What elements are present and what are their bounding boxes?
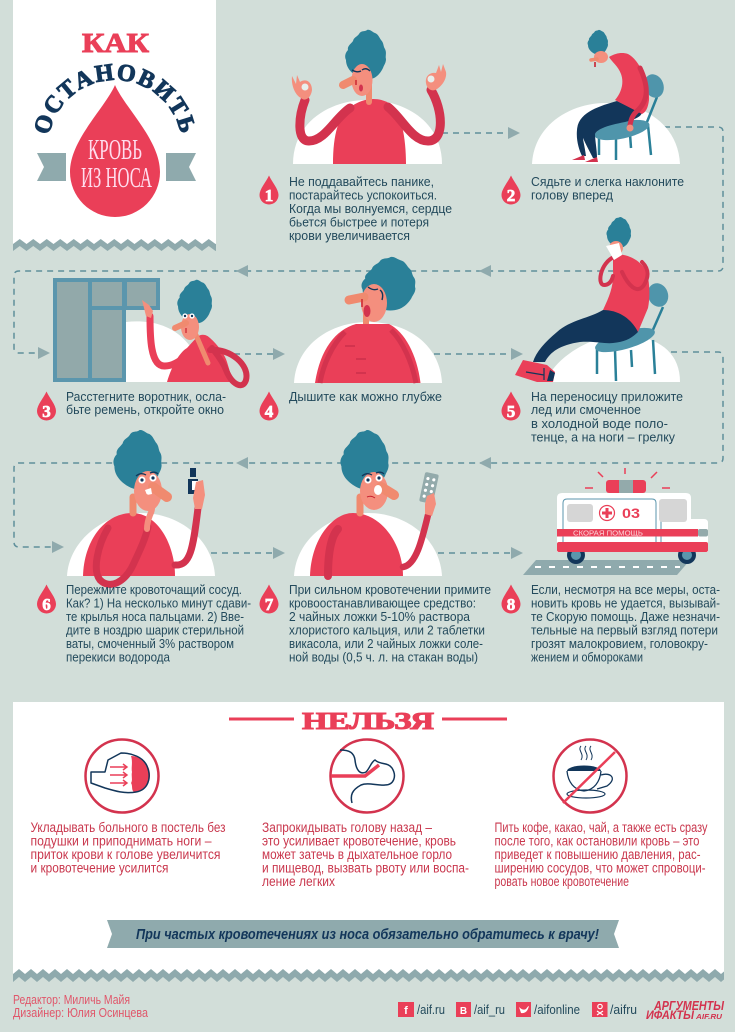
text: step 5: На переносицу приложите	[531, 389, 683, 404]
text: step 8: тельные на первый взгляд потери	[531, 622, 718, 638]
figure 7: holding pills	[294, 430, 442, 576]
text: step 2	[531, 174, 684, 202]
badge 7: 7	[265, 595, 274, 614]
text: step 6	[66, 582, 251, 664]
social links: f	[404, 1005, 408, 1017]
text: step 4: Дышите как можно глубже	[289, 389, 442, 404]
text: no hot drinks: ровать новое кровотечение	[494, 874, 629, 889]
text: step 6: дите в ноздрю шарик стерильной	[66, 622, 244, 638]
badge 4: 4	[265, 402, 274, 421]
panel: prohibitions	[13, 702, 724, 982]
text: step 1: крови увеличивается	[289, 228, 410, 243]
heading: НЕЛЬЗЯ: НЕЛЬЗЯ	[302, 709, 434, 735]
logo: aif: ИФАКТЫ	[646, 1010, 694, 1022]
text: no tilting head	[262, 820, 469, 889]
social links: /aifonline	[534, 1002, 580, 1017]
badge 7	[260, 584, 278, 614]
text: step 8: те Скорую помощь. Даже незначи-	[531, 609, 720, 624]
text: no lying down: Укладывать больного в постель без	[30, 820, 226, 835]
red cross	[600, 506, 614, 520]
text: step 5: тенце, а на ноги – грелку	[531, 430, 675, 444]
text: step 1: постарайтесь успокоиться.	[289, 188, 437, 202]
text: step 1: бьется быстрее и потеря	[289, 214, 429, 230]
text: no hot drinks	[494, 820, 708, 889]
icon: crossed coffee cup	[554, 740, 626, 812]
figure 4: breathing deeply	[294, 257, 442, 383]
text: step 6: Пережмите кровоточащий сосуд.	[66, 582, 242, 597]
text: no tilting head: это усиливает кровотечение, кровь	[262, 834, 456, 848]
figure 6: pinching nose	[67, 430, 215, 584]
badge 2: 2	[507, 186, 515, 205]
figure 1: calm person	[292, 30, 446, 164]
figure 2: seated leaning forward	[532, 30, 680, 164]
badge 5	[502, 392, 520, 421]
badge 3: 3	[42, 402, 51, 421]
badge 6	[37, 584, 56, 614]
footer credits: Редактор: Миличь Майя	[13, 992, 130, 1007]
callout ribbon	[107, 920, 619, 948]
badge 8: 8	[507, 595, 515, 614]
figure 3: opening window	[53, 278, 247, 385]
text: step 5: в холодной воде поло-	[531, 416, 668, 431]
badge 4	[260, 392, 278, 421]
window	[53, 278, 160, 382]
panel: title header	[13, 0, 216, 251]
heading: ОСТАНОВИТЬ: ОСТАНОВИТЬ	[35, 63, 195, 133]
figure 8: ambulance	[523, 468, 708, 575]
text: step 6: те крылья носа пальцами. 2) Вве-	[66, 609, 244, 624]
text: no lying down: приток крови к голове увеличится	[30, 847, 220, 862]
ribbon: right	[166, 153, 196, 181]
badge 1: 1	[265, 186, 273, 205]
drop text: из носа: ИЗ НОСА	[81, 162, 152, 194]
badge 3	[37, 392, 56, 421]
heading: КАК: КАК	[82, 28, 149, 58]
wheels	[567, 546, 696, 564]
number 03: 03	[622, 505, 640, 521]
text: step 7: викасола, или 2 чайных ложки соле-	[289, 636, 483, 651]
social links: /aifru	[610, 1002, 637, 1017]
badge 5: 5	[507, 402, 515, 421]
text: no lying down: подушки и приподнимать ноги –	[30, 834, 212, 848]
blood drop	[70, 85, 160, 217]
text: step 7: хлористого кальция, или 2 таблетки	[289, 622, 485, 638]
text: step 7: При сильном кровотечении примите	[289, 582, 491, 597]
icon: lying head	[86, 740, 158, 812]
dashed connector arrows	[14, 127, 723, 559]
text: no lying down: и кровотечение усилится	[30, 860, 168, 876]
van body	[557, 493, 708, 552]
text: no tilting head: может затечь в дыхательное горло	[262, 847, 452, 862]
badge 2	[502, 176, 520, 205]
text: step 5: лед или смоченное	[531, 402, 641, 417]
text: step 8	[531, 582, 720, 664]
social links	[398, 1002, 637, 1017]
text: step 1: Не поддавайтесь панике,	[289, 174, 434, 189]
social links: В	[460, 1006, 467, 1017]
social links: /aif.ru	[417, 1002, 445, 1017]
icon: head tilted back	[330, 740, 404, 812]
ambulance label: СКОРАЯ ПОМОЩЬ	[573, 530, 643, 538]
text: step 7	[289, 582, 491, 664]
footer credits	[13, 992, 149, 1020]
text: no tilting head: и пищевод, вызвать рвоту или воспа-	[262, 860, 469, 876]
bottle	[188, 468, 198, 494]
text: step 1: Когда мы волнуемся, сердце	[289, 201, 452, 216]
drop text: кровь: КРОВЬ	[88, 134, 142, 166]
text: no tilting head: ление легких	[262, 874, 335, 889]
text: step 2: Сядьте и слегка наклоните	[531, 174, 684, 189]
badge 8	[502, 584, 520, 614]
text: no lying down	[30, 820, 226, 876]
text: step 7: 2 чайных ложки 5-10% раствора	[289, 609, 471, 624]
text: no tilting head: Запрокидывать голову назад –	[262, 820, 432, 835]
text: step 3	[66, 389, 226, 417]
text: step 6: ваты, смоченный 3% раствором	[66, 636, 234, 651]
text: step 2: голову вперед	[531, 188, 613, 202]
text: step 6: Как? 1) На несколько минут сдави-	[66, 596, 251, 610]
text: step 8: жением и обмороками	[531, 650, 643, 664]
callout ribbon: При частых кровотечениях из носа обязательно обратитесь к врачу!	[136, 926, 599, 943]
logo: aif	[646, 999, 724, 1022]
pill blister	[419, 472, 439, 504]
text: step 1	[289, 174, 452, 243]
siren	[585, 468, 670, 493]
social links: /aif_ru	[474, 1002, 505, 1017]
text: step 3: бьте ремень, откройте окно	[66, 402, 224, 417]
text: step 3: Расстегните воротник, осла-	[66, 389, 226, 404]
badge 6: 6	[42, 595, 51, 614]
text: step 5	[531, 389, 683, 444]
figure 5: seated with ice	[515, 217, 680, 382]
logo: aif: АРГУМЕНТЫ	[653, 999, 724, 1013]
text: no hot drinks: приведет к повышению давления, рас-	[494, 847, 700, 862]
text: step 7: ной воды (0,5 ч. л. на стакан воды)	[289, 650, 478, 664]
footer credits: Дизайнер: Юлия Осинцева	[13, 1005, 149, 1020]
text: step 7: кровоостанавливающее средство:	[289, 596, 476, 610]
ribbon: left	[37, 153, 66, 181]
text: no hot drinks: после того, как остановили кровь – это	[494, 834, 700, 848]
badge 1	[260, 176, 278, 205]
text: step 8: грозят малокровием, головокру-	[531, 636, 708, 651]
text: step 6: перекиси водорода	[66, 650, 171, 664]
road	[523, 560, 690, 575]
logo: aif: AIF.RU	[695, 1012, 723, 1021]
